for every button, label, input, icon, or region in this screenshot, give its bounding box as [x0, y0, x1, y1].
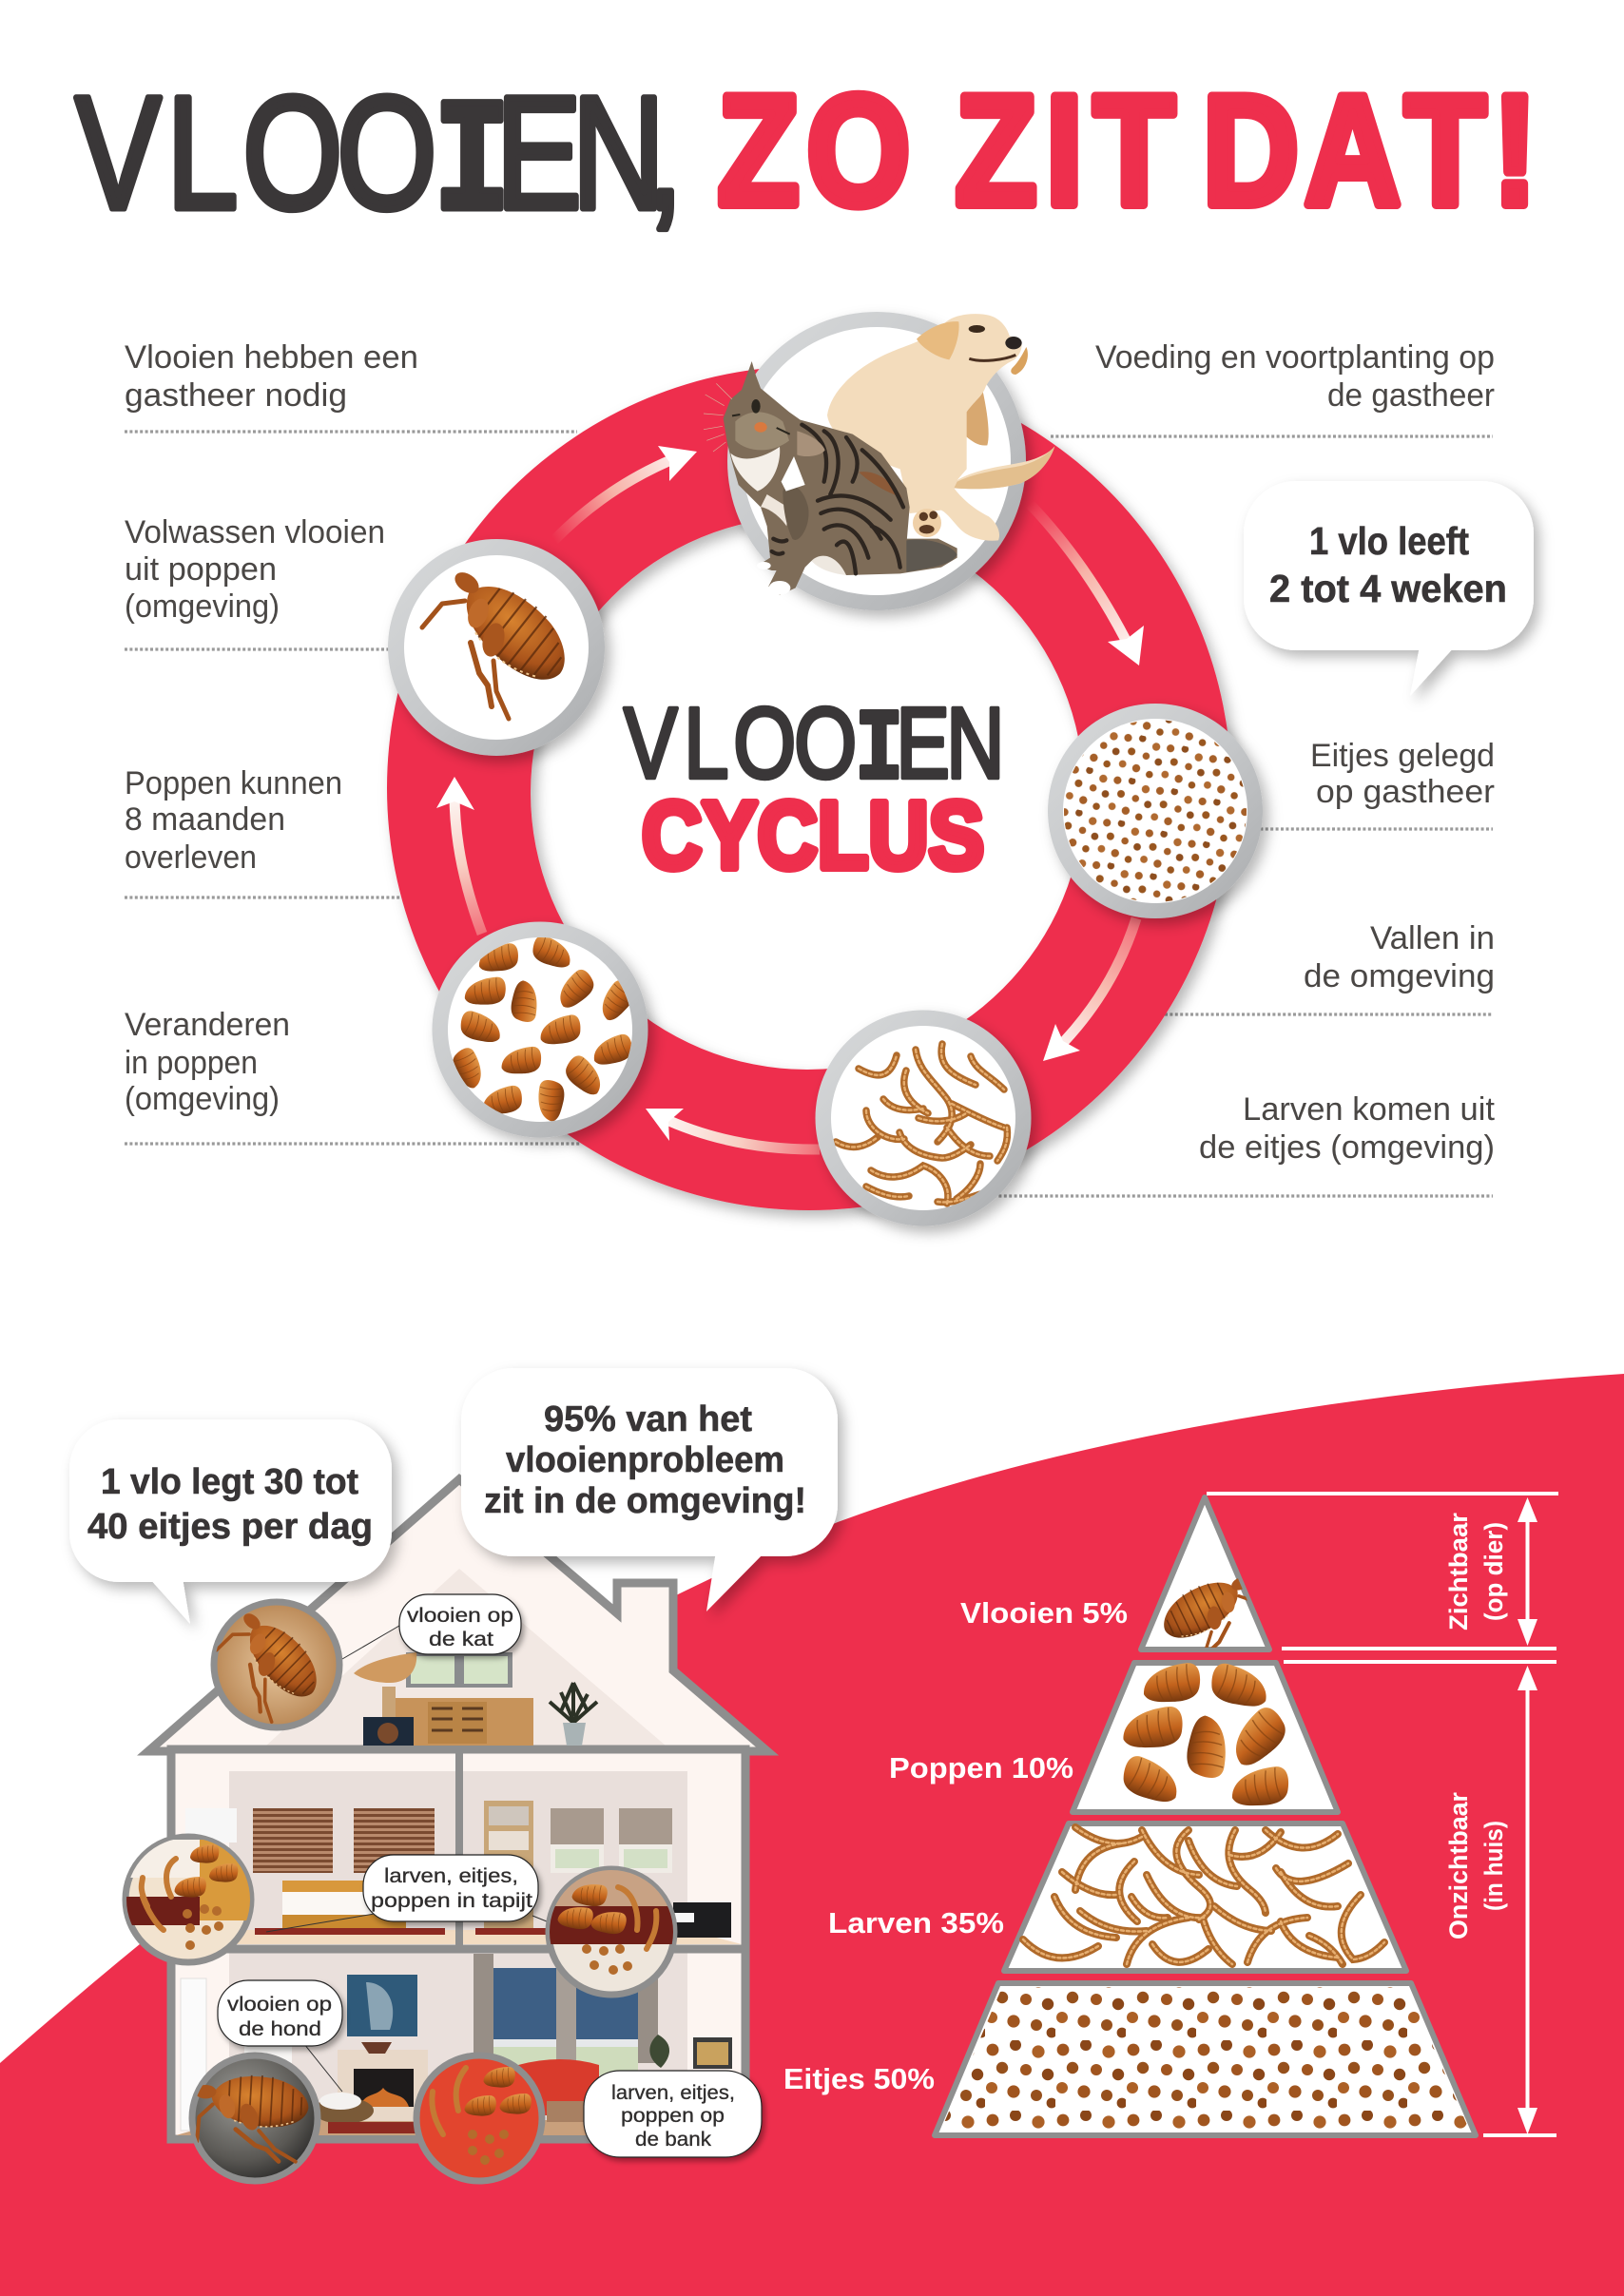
bubble: 95 percent	[461, 1368, 838, 1611]
label: invisible in house	[1444, 1792, 1508, 1939]
label: pupae survive: Poppen kunnen	[125, 765, 342, 801]
house cross-section	[124, 1479, 767, 2201]
label: fleas 5%: Vlooien 5%	[960, 1596, 1128, 1630]
tag: fleas on the dog	[218, 1980, 342, 2046]
tag: sofa: poppen op	[621, 2105, 725, 2127]
bubble: eggs per day: 40 eitjes per dag	[87, 1507, 373, 1547]
label: turn into pupae: (omgeving)	[125, 1081, 280, 1117]
flea population pyramid	[935, 1497, 1476, 2135]
tag: fleas on the cat	[399, 1594, 521, 1654]
label: host needed: gastheer nodig	[125, 377, 347, 414]
label: pupae 10%: Poppen 10%	[889, 1751, 1073, 1785]
bubble: eggs per day	[69, 1419, 392, 1624]
label: eggs laid	[1310, 738, 1495, 810]
label: turn into pupae: in poppen	[125, 1045, 258, 1081]
pyramid labels	[783, 1596, 1128, 2095]
bubble: 95 percent: vlooienprobleem	[506, 1440, 784, 1480]
tag: fleas on the dog: de hond	[239, 2018, 321, 2040]
tag: fleas on the dog: vlooien op	[227, 1994, 332, 2016]
label: host needed	[125, 339, 418, 414]
tag: carpet: larven, eitjes,	[384, 1865, 518, 1887]
label: adults from pupae: uit poppen	[125, 551, 277, 588]
label: pupae survive: overleven	[125, 839, 257, 876]
tag: sofa: larven, eitjes,	[611, 2082, 735, 2104]
bubble: eggs per day: 1 vlo legt 30 tot	[101, 1462, 358, 1502]
bubble: 95 percent: 95% van het	[544, 1399, 752, 1439]
tag: carpet	[363, 1855, 538, 1921]
label: feeding: de gastheer	[1327, 377, 1495, 414]
tier: eggs 50%	[935, 1983, 1476, 2135]
center word vlooien: I	[855, 694, 903, 808]
arrow 1	[554, 446, 697, 540]
label: turn into pupae: Veranderen	[125, 1007, 290, 1043]
bubble: flea lifespan	[1244, 481, 1534, 696]
tag: fleas on the cat: vlooien op	[407, 1605, 513, 1627]
label: eggs 50%: Eitjes 50%	[783, 2062, 935, 2095]
center word cyclus: CYCLUS	[642, 782, 984, 889]
label: visible on animal	[1444, 1513, 1508, 1630]
bubble: flea lifespan: 2 tot 4 weken	[1269, 567, 1507, 610]
bubble: flea lifespan: 1 vlo leeft	[1309, 519, 1469, 563]
tag: sofa	[584, 2071, 762, 2157]
tier: adult fleas 5%	[1141, 1497, 1272, 1681]
label: adults from pupae: (omgeving)	[125, 588, 280, 625]
label: fall off: de omgeving	[1304, 958, 1495, 994]
label: eggs laid: op gastheer	[1316, 774, 1495, 810]
tier: pupae 10%	[1073, 1661, 1338, 1812]
center word vlooien: VLOO	[624, 687, 857, 800]
title: Vlooien,: I	[434, 75, 511, 257]
attic furniture	[354, 1652, 597, 1746]
label: eggs laid: Eitjes gelegd	[1310, 738, 1495, 774]
label: larvae hatch	[1199, 1091, 1496, 1166]
cycle ring	[387, 366, 1231, 1210]
label: larvae hatch: de eitjes (omgeving)	[1199, 1129, 1495, 1166]
arrow 4	[646, 1109, 820, 1149]
arrow: invisible range	[1518, 1666, 1537, 2134]
circle: larvae	[816, 1010, 1031, 1226]
magnifier: sofa	[416, 2055, 542, 2181]
magnifier: carpet	[549, 1868, 674, 1995]
title: Vlooien,: EN,	[496, 64, 683, 242]
magnifier: left room larvae eggs pupae	[124, 1837, 257, 1962]
circle: dog and cat scratching	[704, 312, 1054, 610]
house shell	[148, 1479, 767, 2139]
cycle labels right	[1095, 339, 1496, 1166]
label: larvae hatch: Larven komen uit	[1243, 1091, 1496, 1128]
label: feeding	[1095, 339, 1495, 414]
tier: larvae 35%	[1004, 1823, 1406, 1971]
center word vlooien: EN	[896, 687, 1004, 800]
tag: sofa: de bank	[635, 2129, 712, 2151]
label: pupae survive	[125, 765, 342, 876]
label: visible on animal: (op dier)	[1479, 1522, 1508, 1621]
dotted leader lines	[125, 432, 1493, 1196]
arrows around the cycle	[436, 446, 1144, 1149]
magnifier: flea on cat	[210, 1602, 339, 1727]
center title: vlooien cyclus	[624, 687, 1004, 889]
cat	[704, 361, 957, 595]
magnifier: flea on dog	[169, 2029, 344, 2201]
arrow: visible range	[1518, 1497, 1537, 1646]
label: feeding: Voeding en voortplanting op	[1095, 339, 1495, 376]
arrow 3	[1043, 918, 1136, 1061]
red background wave	[0, 1374, 1624, 2296]
tag: fleas on the cat: de kat	[429, 1629, 493, 1650]
title: zo zit dat!: ZO ZIT DAT!	[718, 63, 1537, 239]
bubble: 95 percent: zit in de omgeving!	[484, 1481, 806, 1521]
label: invisible in house: (in huis)	[1479, 1821, 1508, 1911]
arrow 2	[1030, 504, 1144, 666]
title: Vlooien,: VLOO	[75, 64, 437, 242]
circle: pupae	[432, 922, 648, 1137]
visibility brackets	[1207, 1494, 1558, 2135]
label: adults from pupae	[125, 514, 385, 625]
label: fall off	[1304, 920, 1495, 994]
circle: eggs	[1048, 704, 1263, 918]
tag: carpet: poppen in tapijt	[371, 1890, 532, 1912]
label: invisible in house: Onzichtbaar	[1444, 1792, 1473, 1939]
label: pupae survive: 8 maanden	[125, 801, 285, 838]
cycle labels left	[125, 339, 418, 1117]
label: host needed: Vlooien hebben een	[125, 339, 418, 376]
ground floor furniture	[181, 1626, 732, 2133]
circle: flea	[388, 539, 605, 756]
title	[75, 63, 1537, 257]
dog	[827, 314, 1054, 541]
upper floor furniture	[185, 1801, 731, 1938]
label: larvae 35%: Larven 35%	[828, 1906, 1004, 1939]
label: adults from pupae: Volwassen vlooien	[125, 514, 385, 550]
arrow 5	[436, 777, 482, 934]
label: fall off: Vallen in	[1370, 920, 1495, 956]
label: visible on animal: Zichtbaar	[1444, 1513, 1473, 1630]
label: turn into pupae	[125, 1007, 290, 1117]
